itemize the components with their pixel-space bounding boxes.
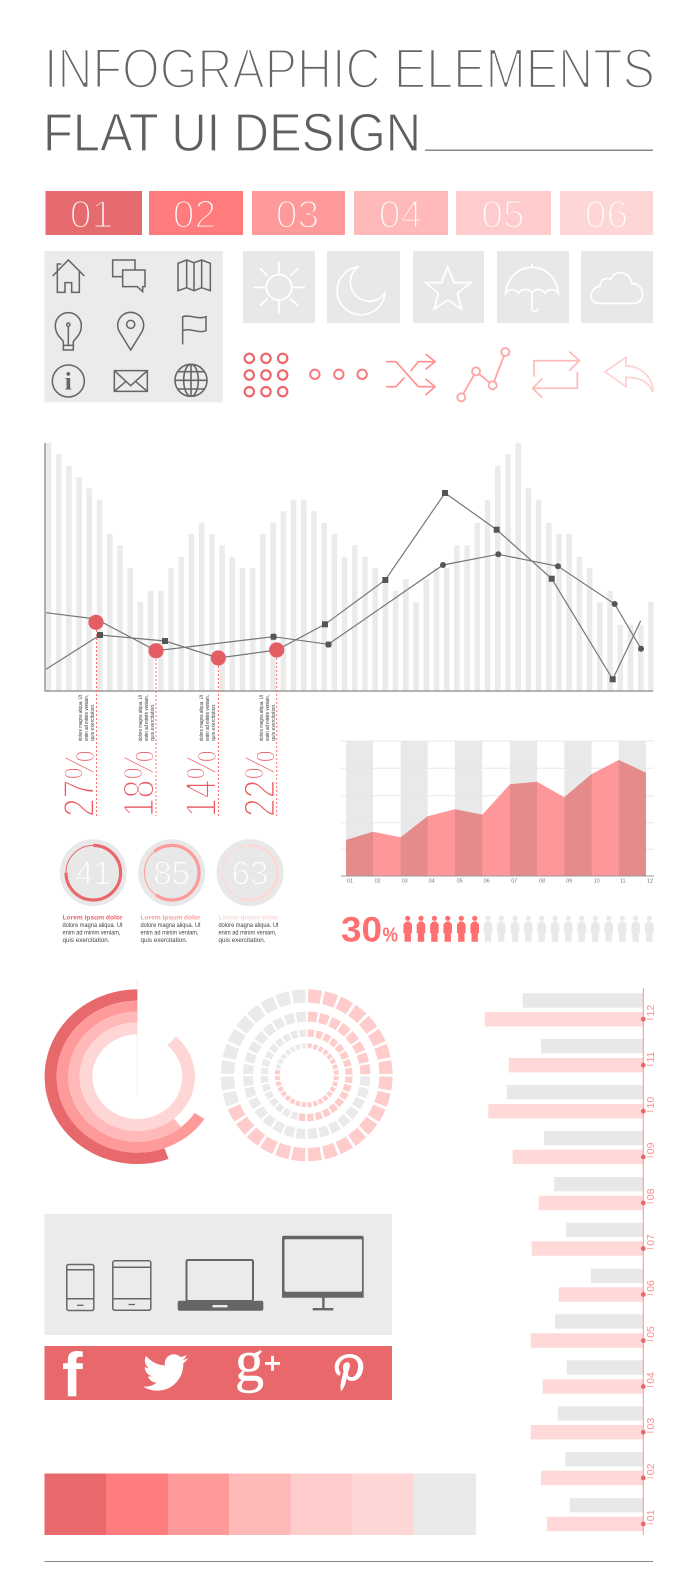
icon: umbrella — [506, 264, 558, 312]
icon: laptop — [178, 1260, 263, 1311]
area fill — [346, 760, 646, 876]
ring 2 — [62, 1006, 200, 1147]
stat 27%: 27% — [55, 750, 104, 817]
icon: three dots — [310, 370, 367, 379]
icon: cloud — [591, 273, 643, 303]
icon: flag — [183, 316, 206, 344]
ring 3 — [74, 1017, 178, 1136]
icon: home — [53, 260, 84, 292]
gauge caption 2: Lorem ipsum dolor — [140, 914, 201, 922]
panel: cloud — [581, 251, 653, 323]
30 percent stat: 30 — [341, 911, 382, 950]
timeline labels: 06 — [645, 1280, 657, 1292]
timeline axis — [642, 988, 644, 1535]
30 percent stat — [341, 911, 398, 950]
people pictogram — [403, 916, 654, 942]
icon: sun — [253, 262, 305, 313]
timeline labels: 03 — [645, 1418, 657, 1430]
background bars — [46, 443, 654, 691]
gauge 63 — [216, 839, 284, 906]
panel: sun — [243, 251, 315, 323]
stat 27%: quis exercitation. — [90, 703, 96, 741]
area chart axis labels: 04 — [429, 878, 435, 884]
area chart axis labels: 08 — [539, 878, 545, 884]
axes — [45, 443, 653, 691]
numbered tabs: 05 — [481, 194, 525, 236]
stat 18%: dolore magna aliqua. Ut — [138, 694, 144, 741]
gauge 85: 85 — [153, 854, 190, 892]
timeline labels: 09 — [645, 1142, 657, 1154]
gauge caption 3: quis exercitation. — [218, 937, 266, 944]
gauge caption 2: quis exercitation. — [140, 937, 188, 944]
icon: pinterest — [335, 1354, 363, 1391]
panel: dark line icons — [44, 251, 223, 402]
area chart — [341, 741, 654, 884]
timeline labels: 10 — [645, 1097, 657, 1108]
horizontal bar timeline — [485, 988, 657, 1535]
stat 22%: quis exercitation. — [271, 703, 277, 741]
timeline labels: 07 — [645, 1234, 657, 1246]
radial arc chart — [51, 980, 200, 1158]
stat 14%: dolore magna aliqua. Ut — [199, 694, 205, 741]
area chart axis labels: 05 — [457, 878, 463, 884]
dashed leader lines — [96, 622, 277, 816]
numbered tabs: 02 — [173, 194, 216, 236]
icon: reply arrow — [605, 357, 653, 392]
gauge 41: 41 — [75, 854, 112, 892]
stat 22%: dolore magna aliqua. Ut — [259, 694, 265, 741]
timeline labels: 05 — [645, 1326, 657, 1338]
red data points — [88, 615, 284, 666]
gauge caption 3: dolore magna aliqua. Ut — [218, 922, 279, 929]
second segmented ring — [248, 1017, 365, 1134]
panel: social bar — [44, 1328, 392, 1410]
numbered tabs: 01 — [70, 194, 113, 236]
panel: umbrella — [497, 251, 569, 323]
numbered tabs — [46, 191, 653, 236]
line series two — [46, 493, 641, 679]
grey bars — [507, 993, 643, 1512]
area chart axis labels: 06 — [484, 878, 490, 884]
icon: shuffle — [386, 354, 435, 395]
icon: chat — [113, 260, 145, 292]
stat 14%: quis exercitation. — [211, 703, 217, 741]
icon: twitter — [143, 1354, 188, 1391]
timeline labels: 12 — [645, 1005, 657, 1016]
gauge 63: 63 — [232, 854, 268, 892]
gauge 85 — [138, 839, 205, 906]
gauge caption 2: dolore magna aliqua. Ut — [140, 922, 201, 929]
icon: mail — [114, 371, 147, 391]
title line 2: FLAT UI DESIGN — [43, 103, 421, 163]
gauge caption 1: enim ad minim veniam, — [62, 930, 121, 936]
timeline labels: 08 — [645, 1188, 657, 1200]
area chart axis labels: 01 — [347, 878, 353, 884]
gauge caption 2 — [140, 914, 201, 944]
bar and line chart — [45, 443, 654, 816]
area chart axis labels: 11 — [620, 878, 626, 884]
icon: globe — [175, 364, 207, 396]
stat 27%: enim ad minim veniam, — [84, 695, 90, 741]
ring 4 — [86, 1028, 189, 1125]
stat 14%: 14% — [177, 750, 226, 817]
stat 18%: 18% — [115, 750, 164, 817]
area chart axis labels — [347, 878, 653, 884]
gauge caption 3: enim ad minim veniam, — [218, 930, 277, 936]
gauge caption 1 — [62, 914, 123, 944]
gauge caption 3: Lorem ipsum dolor — [218, 914, 279, 922]
ring 1 — [51, 995, 167, 1158]
panel: star — [413, 251, 484, 323]
area chart axis labels: 03 — [402, 878, 408, 884]
30 percent stat: % — [382, 925, 398, 947]
icon: google plus: g — [235, 1328, 264, 1394]
stat 27%: dolore magna aliqua. Ut — [78, 694, 84, 741]
icon: info: i — [65, 368, 72, 396]
third segmented ring — [264, 1033, 349, 1118]
timeline labels: 02 — [645, 1463, 657, 1475]
icon: facebook: f — [62, 1341, 83, 1410]
icon: monitor — [282, 1236, 364, 1310]
colour palette — [44, 1474, 476, 1535]
icon: star — [426, 267, 471, 309]
stat 14%: enim ad minim veniam, — [205, 695, 211, 741]
area chart axis labels: 12 — [647, 878, 653, 884]
stat 18%: quis exercitation. — [150, 703, 156, 741]
timeline labels: 04 — [645, 1372, 657, 1384]
icon: repeat — [533, 352, 579, 398]
timeline dots — [641, 1017, 646, 1526]
outer segmented ring — [227, 996, 386, 1155]
icon: line graph — [457, 348, 509, 401]
gauge caption 3 — [218, 914, 279, 944]
gauge caption 1: dolore magna aliqua. Ut — [62, 922, 123, 929]
gauge 41 — [60, 839, 127, 906]
icon: map — [178, 260, 210, 291]
gauge caption 2: enim ad minim veniam, — [140, 930, 199, 936]
icon: light bulb — [55, 313, 81, 350]
inner segmented ring — [277, 1046, 336, 1105]
pink bars — [485, 1012, 643, 1531]
area chart axis labels: 07 — [511, 878, 517, 884]
percent labels and rotated captions — [55, 694, 284, 817]
area chart axis labels: 09 — [566, 878, 572, 884]
icon: moon — [337, 267, 385, 315]
panel: devices — [44, 1214, 392, 1335]
area chart axis labels: 02 — [375, 878, 381, 884]
numbered tabs: 04 — [379, 194, 422, 236]
icon: map pin — [118, 312, 144, 350]
icon: tablet — [113, 1261, 151, 1310]
gauge caption 1: Lorem ipsum dolor — [62, 914, 123, 922]
stat 22%: 22% — [235, 750, 284, 817]
stat 22%: enim ad minim veniam, — [265, 695, 271, 741]
segmented radial chart — [227, 996, 386, 1155]
icon: google plus — [235, 1328, 280, 1394]
line series one — [46, 554, 641, 651]
icon: nine dot grid — [245, 354, 287, 396]
timeline labels — [645, 1005, 657, 1521]
icon: phone — [67, 1264, 94, 1310]
numbered tabs: 06 — [585, 194, 628, 236]
stat 18%: enim ad minim veniam, — [144, 695, 150, 741]
square markers — [97, 490, 644, 682]
icon: info — [52, 365, 84, 397]
numbered tabs: 03 — [276, 194, 319, 236]
timeline labels: 11 — [645, 1051, 657, 1062]
area chart axis labels: 10 — [594, 878, 600, 884]
panel: moon — [327, 251, 400, 323]
gauge caption 1: quis exercitation. — [62, 937, 110, 944]
timeline labels: 01 — [645, 1509, 657, 1521]
